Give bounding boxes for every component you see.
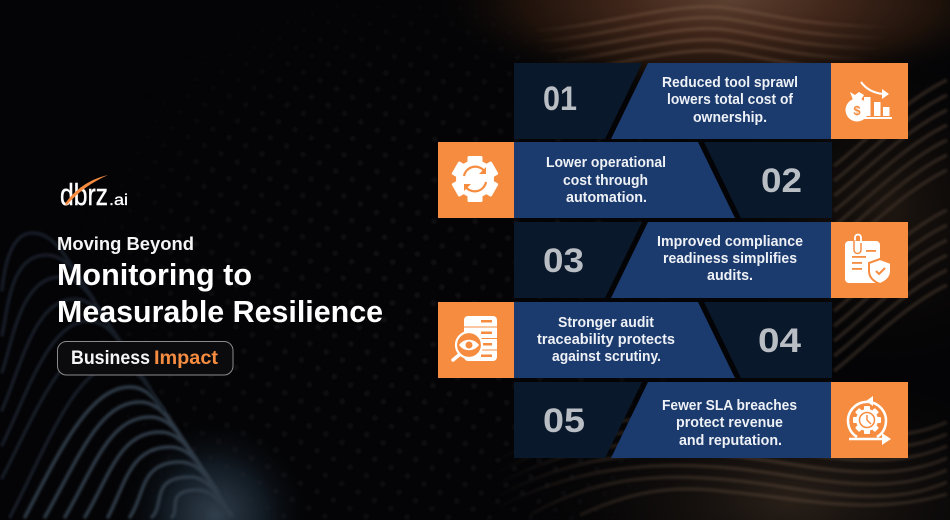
text panel 01 xyxy=(611,63,831,139)
text 03: readiness simplifies xyxy=(663,250,797,267)
text 05: protect revenue xyxy=(676,414,783,431)
number panel 03 xyxy=(514,222,642,298)
icon box 05: gear clock in cycle arrows xyxy=(831,382,908,458)
text 02: cost through xyxy=(563,172,648,189)
text 04: against scrutiny. xyxy=(552,348,661,365)
number panel 02 xyxy=(704,142,832,218)
icon box 02: gear with sync arrows xyxy=(438,142,514,218)
main title: Monitoring to xyxy=(57,257,252,292)
text 02: Lower operational xyxy=(546,154,666,171)
number panel 01 xyxy=(514,63,642,139)
badge: Business Impact: Business xyxy=(71,348,150,369)
text 03: audits. xyxy=(707,267,753,284)
text 02 xyxy=(546,154,666,206)
row 03 xyxy=(514,222,908,298)
logo: dbrz.ai: .ai xyxy=(109,192,128,209)
icon box 04: server with magnifier and eye xyxy=(438,302,514,378)
text 03: Improved compliance xyxy=(657,233,803,250)
text 05 xyxy=(662,397,797,449)
logo swoosh xyxy=(65,175,108,205)
text 04: traceability protects xyxy=(537,331,675,348)
text 01: lowers total cost of xyxy=(667,91,794,108)
text 05: and reputation. xyxy=(679,432,782,449)
text panel 05 xyxy=(611,382,831,458)
eyebrow heading: Moving Beyond xyxy=(57,233,194,254)
row 02 xyxy=(438,142,832,218)
row 01 xyxy=(514,63,908,139)
text 05: Fewer SLA breaches xyxy=(662,397,797,414)
number 02: 02 xyxy=(761,162,802,200)
number panel 05 xyxy=(514,382,642,458)
text 01 xyxy=(662,74,798,126)
main title xyxy=(57,257,383,329)
text 04 xyxy=(537,314,675,365)
main title: Measurable Resilience xyxy=(57,294,383,329)
badge: Business Impact xyxy=(58,342,233,375)
icon box 03: clipboard with shield xyxy=(831,222,908,298)
text 04: Stronger audit xyxy=(558,314,654,331)
number 03: 03 xyxy=(543,242,584,280)
number 04: 04 xyxy=(758,322,801,360)
icon box 01: money bag and falling bars: $ xyxy=(853,103,861,118)
text 02: automation. xyxy=(566,189,647,206)
text panel 02 xyxy=(514,142,735,218)
row 05 xyxy=(514,382,908,458)
logo: dbrz.ai: dbrz xyxy=(60,177,108,212)
text panel 04 xyxy=(514,302,735,378)
number 01: 01 xyxy=(543,80,577,118)
badge: Business Impact: Impact xyxy=(154,348,219,369)
icon box 01: money bag and falling bars xyxy=(831,63,908,139)
text 01: Reduced tool sprawl xyxy=(662,74,798,91)
number 05: 05 xyxy=(543,402,585,440)
text panel 03 xyxy=(611,222,831,298)
text 01: ownership. xyxy=(693,109,767,126)
row 04 xyxy=(438,302,832,378)
number panel 04 xyxy=(704,302,832,378)
text 03 xyxy=(657,233,803,284)
